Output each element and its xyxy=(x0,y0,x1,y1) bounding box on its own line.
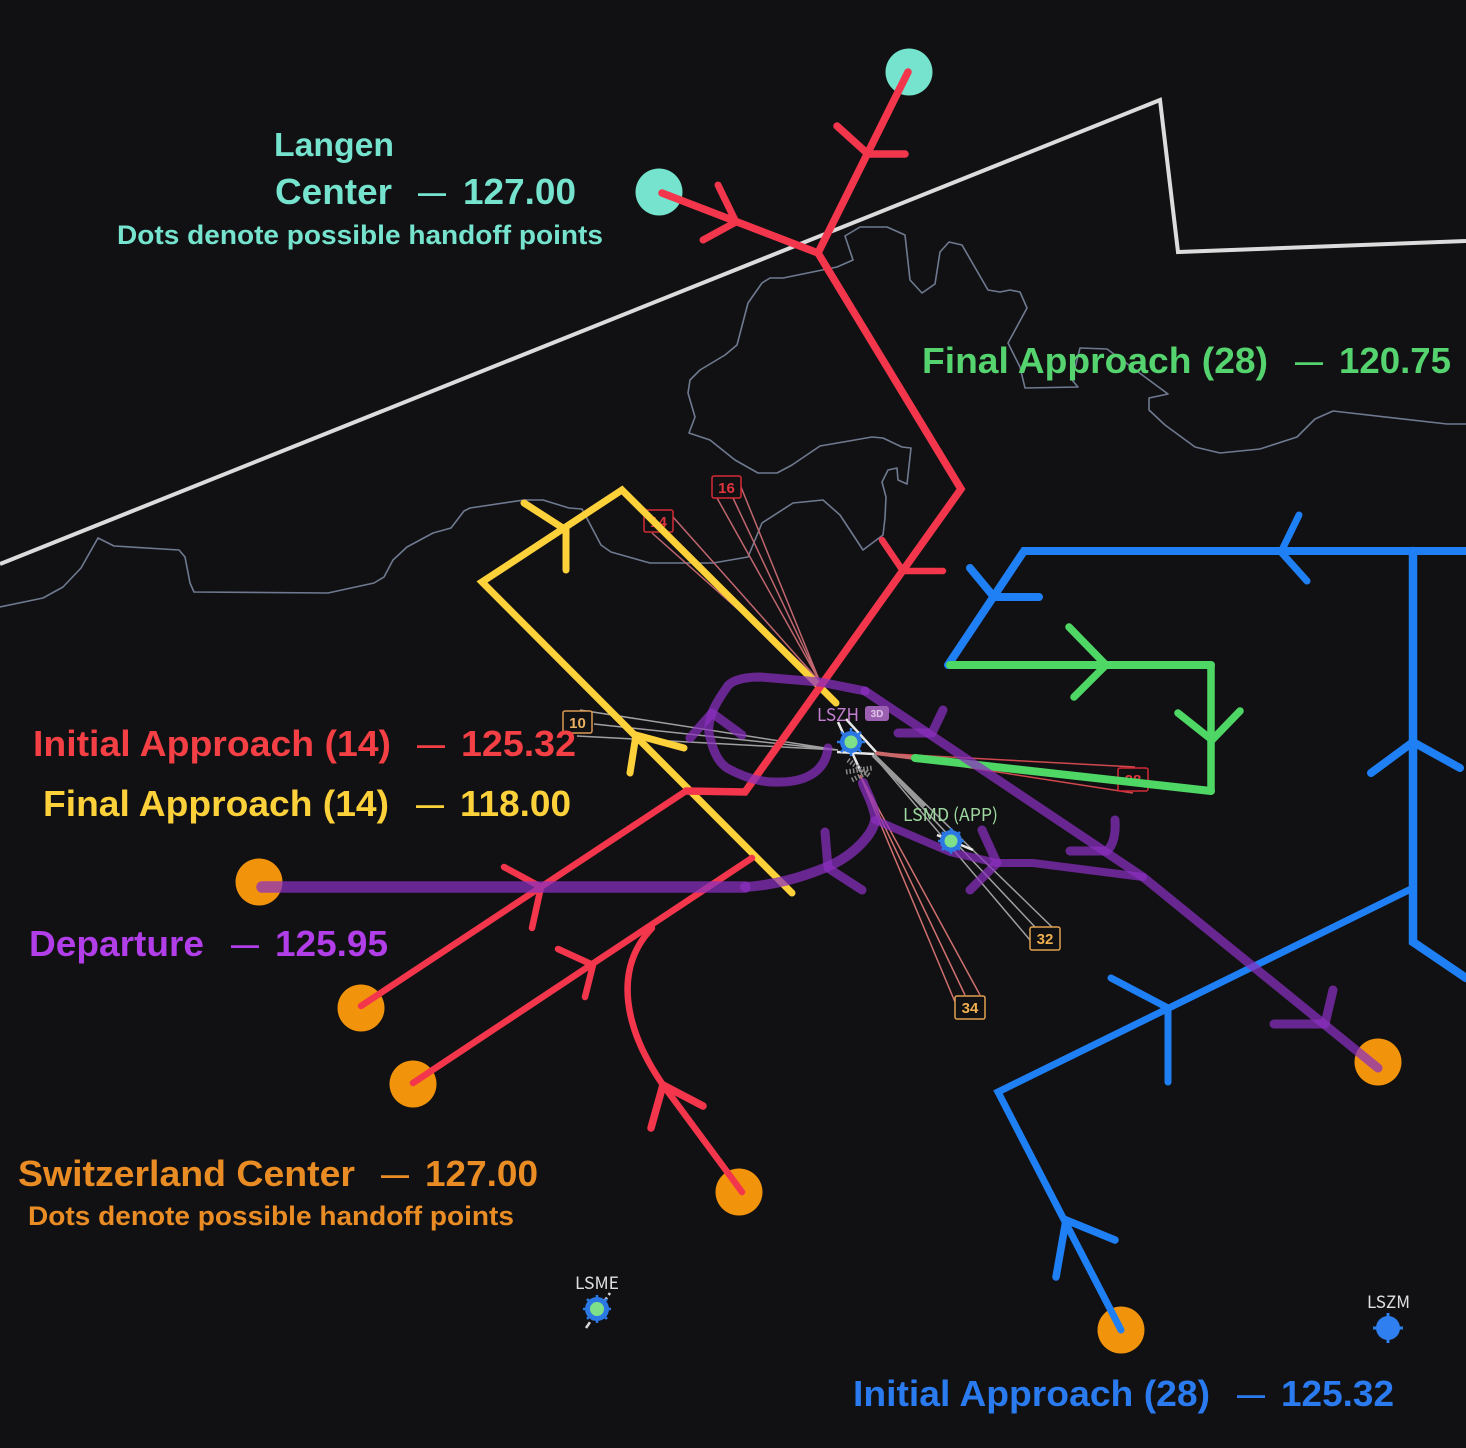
label: Initial Approach 14 xyxy=(33,723,576,764)
airport: LSZH xyxy=(817,701,889,756)
runway 16 approach lines and label: 16 xyxy=(718,480,735,497)
airport: LSME: LSME xyxy=(575,1269,619,1294)
label: Departure: — xyxy=(231,929,259,960)
label: Langen Center: — xyxy=(418,177,446,208)
handoff dots: Switzerland Center (orange) xyxy=(236,858,1402,1354)
label: Final Approach 28: — xyxy=(1295,346,1323,377)
label: Initial Approach 14: 125.32 xyxy=(461,723,576,764)
label: Langen Center: Langen xyxy=(274,126,394,163)
final approach 14 route (yellow) xyxy=(482,490,836,893)
airport: LSZH: 3D xyxy=(871,709,883,720)
initial approach 28 route (blue) xyxy=(948,515,1466,1330)
label: Final Approach 14: Final Approach (14) xyxy=(43,783,389,824)
runway 14 approach lines and label: 14 xyxy=(650,514,667,531)
runway 34 approach lines and label xyxy=(860,775,985,1019)
label: Final Approach 14 xyxy=(43,783,571,824)
runway 10 approach lines and label: 10 xyxy=(569,715,586,732)
label: Initial Approach 14: — xyxy=(417,729,445,760)
label: Departure xyxy=(29,923,388,964)
label: Switzerland Center: 127.00 xyxy=(425,1153,538,1194)
label: Final Approach 28: 120.75 xyxy=(1339,340,1451,381)
label: Initial Approach 28: Initial Approach (28) xyxy=(853,1373,1210,1414)
runway 16 approach lines and label xyxy=(712,476,820,682)
final approach 28 route (green) xyxy=(915,627,1240,791)
label: Langen Center: Center xyxy=(275,171,392,212)
label: Departure: Departure xyxy=(29,923,204,964)
airport: LSZM xyxy=(1367,1288,1410,1343)
runway 32 approach lines and label: 32 xyxy=(1037,931,1053,948)
label: Departure: 125.95 xyxy=(275,923,388,964)
runway 34 approach lines and label: 34 xyxy=(962,1000,979,1017)
label: Langen Center: 127.00 xyxy=(463,171,576,212)
airport: LSME xyxy=(575,1269,619,1328)
airport: LSMD (APP) xyxy=(903,801,998,854)
airspace boundary line xyxy=(0,100,1466,564)
runway 28 approach lines and label: 28 xyxy=(1125,772,1141,789)
label: Final Approach 14: — xyxy=(416,789,444,820)
initial approach 14 route (red) xyxy=(361,72,961,1192)
runway 10 approach lines and label xyxy=(563,710,838,750)
runway 32 approach lines and label xyxy=(873,753,1060,950)
label: Switzerland Center: Dots denote possible handoff points xyxy=(28,1201,514,1231)
runway 28 approach lines and label xyxy=(875,753,1148,793)
airport: LSZH: LSZH xyxy=(817,701,859,727)
label: Langen Center xyxy=(117,126,603,250)
label: Initial Approach 28: — xyxy=(1237,1379,1265,1410)
runway 14 approach lines and label xyxy=(644,510,820,682)
handoff dots: Langen Center (teal) xyxy=(636,48,932,216)
label: Switzerland Center: — xyxy=(381,1159,409,1190)
national border outlines xyxy=(0,227,1466,607)
label: Switzerland Center: Switzerland Center xyxy=(18,1153,355,1194)
label: Initial Approach 28 xyxy=(853,1373,1394,1414)
label: Initial Approach 28: 125.32 xyxy=(1281,1373,1394,1414)
airport: LSZM: LSZM xyxy=(1367,1288,1410,1313)
label: Final Approach 28 xyxy=(922,340,1451,381)
label: Final Approach 14: 118.00 xyxy=(460,783,571,824)
label: Switzerland Center xyxy=(18,1153,538,1231)
LSZH runway cluster xyxy=(837,719,876,780)
label: Final Approach 28: Final Approach (28) xyxy=(922,340,1268,381)
departure route (purple) xyxy=(262,677,1378,1068)
label: Langen Center: Dots denote possible handoff points xyxy=(117,220,603,250)
label: Initial Approach 14: Initial Approach (14) xyxy=(33,723,391,764)
airport: LSMD (APP): LSMD (APP) xyxy=(903,801,998,827)
